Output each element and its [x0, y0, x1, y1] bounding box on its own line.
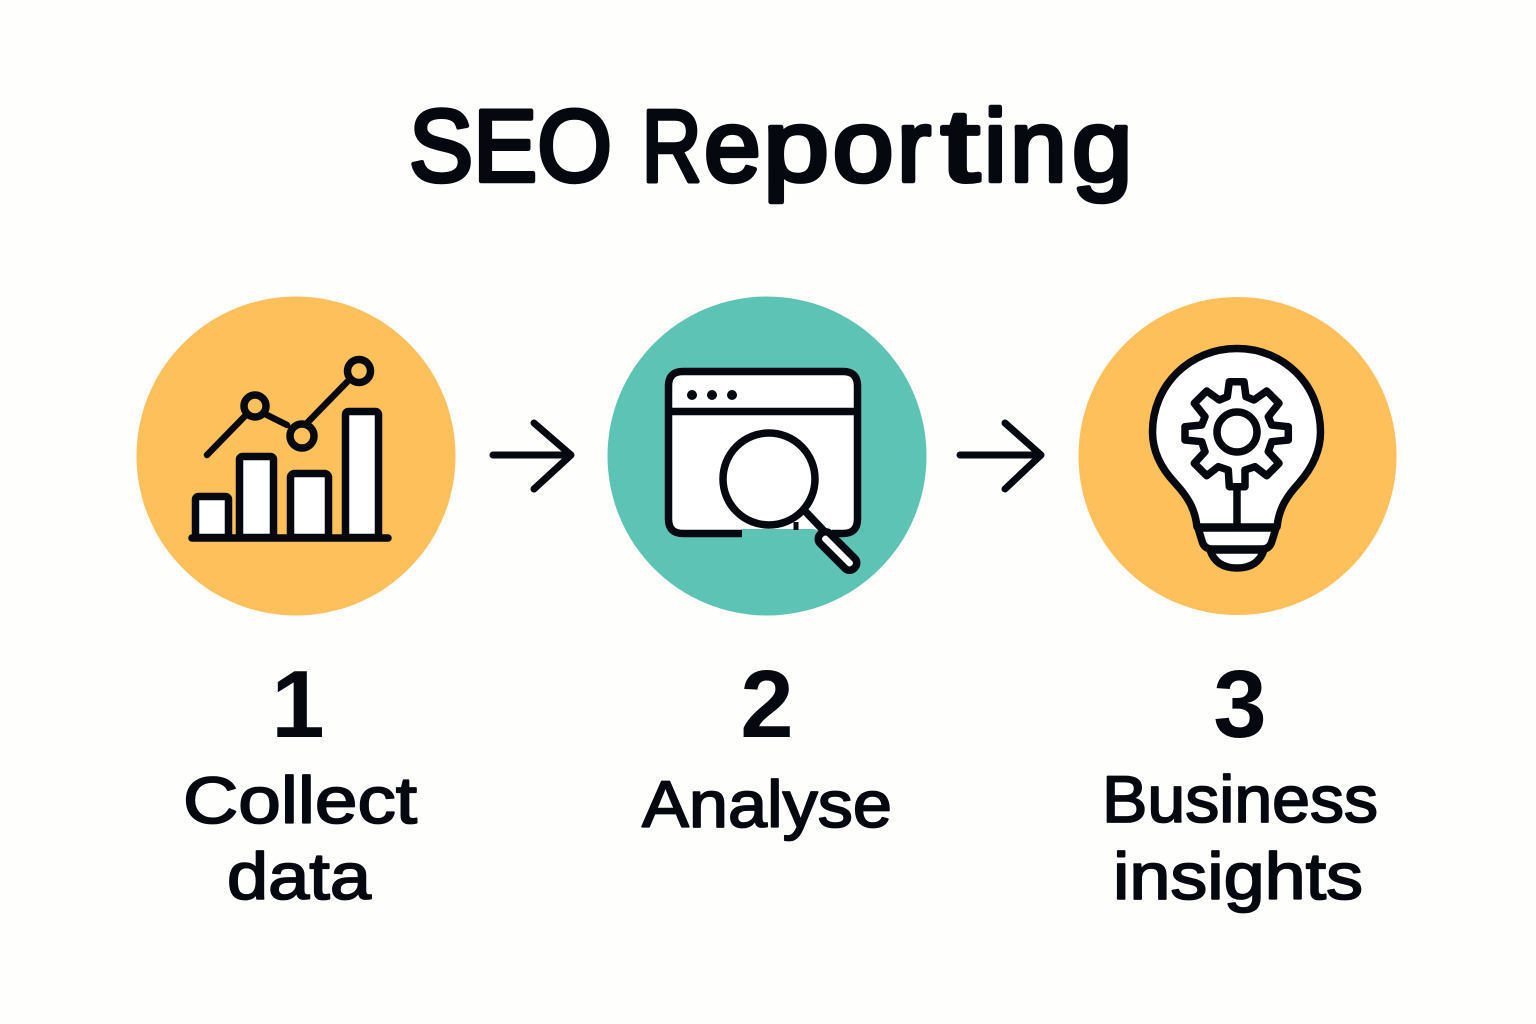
- label: business insights: insights: [1113, 839, 1363, 913]
- label: collect data: Collect: [183, 763, 417, 837]
- circle: step 1: [136, 296, 456, 616]
- number 3: 3: [1213, 651, 1267, 758]
- title: n: [1010, 89, 1067, 203]
- title: o: [833, 89, 894, 203]
- icon: light bulb with gear: [1152, 348, 1320, 568]
- title: e: [704, 89, 761, 203]
- number 1: 1: [271, 651, 325, 758]
- title: g: [1072, 89, 1132, 203]
- title: R: [642, 89, 702, 203]
- icon: browser window with magnifier: [668, 372, 859, 573]
- title: t: [941, 89, 980, 203]
- circle: step 3: [1078, 297, 1396, 615]
- step 2: analyse: [608, 296, 926, 841]
- label: analyse: Analyse: [642, 767, 892, 841]
- label: business insights: Business: [1102, 762, 1378, 836]
- title: SEO: [409, 89, 612, 203]
- icon: bar chart with trend line: [192, 360, 388, 538]
- title: i: [984, 89, 1007, 203]
- arrow: step 1 to step 2: [493, 423, 571, 489]
- step 1: collect data: [136, 296, 456, 913]
- arrow: step 2 to step 3: [960, 423, 1041, 489]
- title: p: [763, 89, 829, 203]
- circle: step 2: [608, 296, 926, 616]
- label: collect data: data: [227, 839, 371, 913]
- step 3: business insights: [1078, 297, 1396, 913]
- number 2: 2: [740, 651, 794, 758]
- title: r: [897, 89, 931, 203]
